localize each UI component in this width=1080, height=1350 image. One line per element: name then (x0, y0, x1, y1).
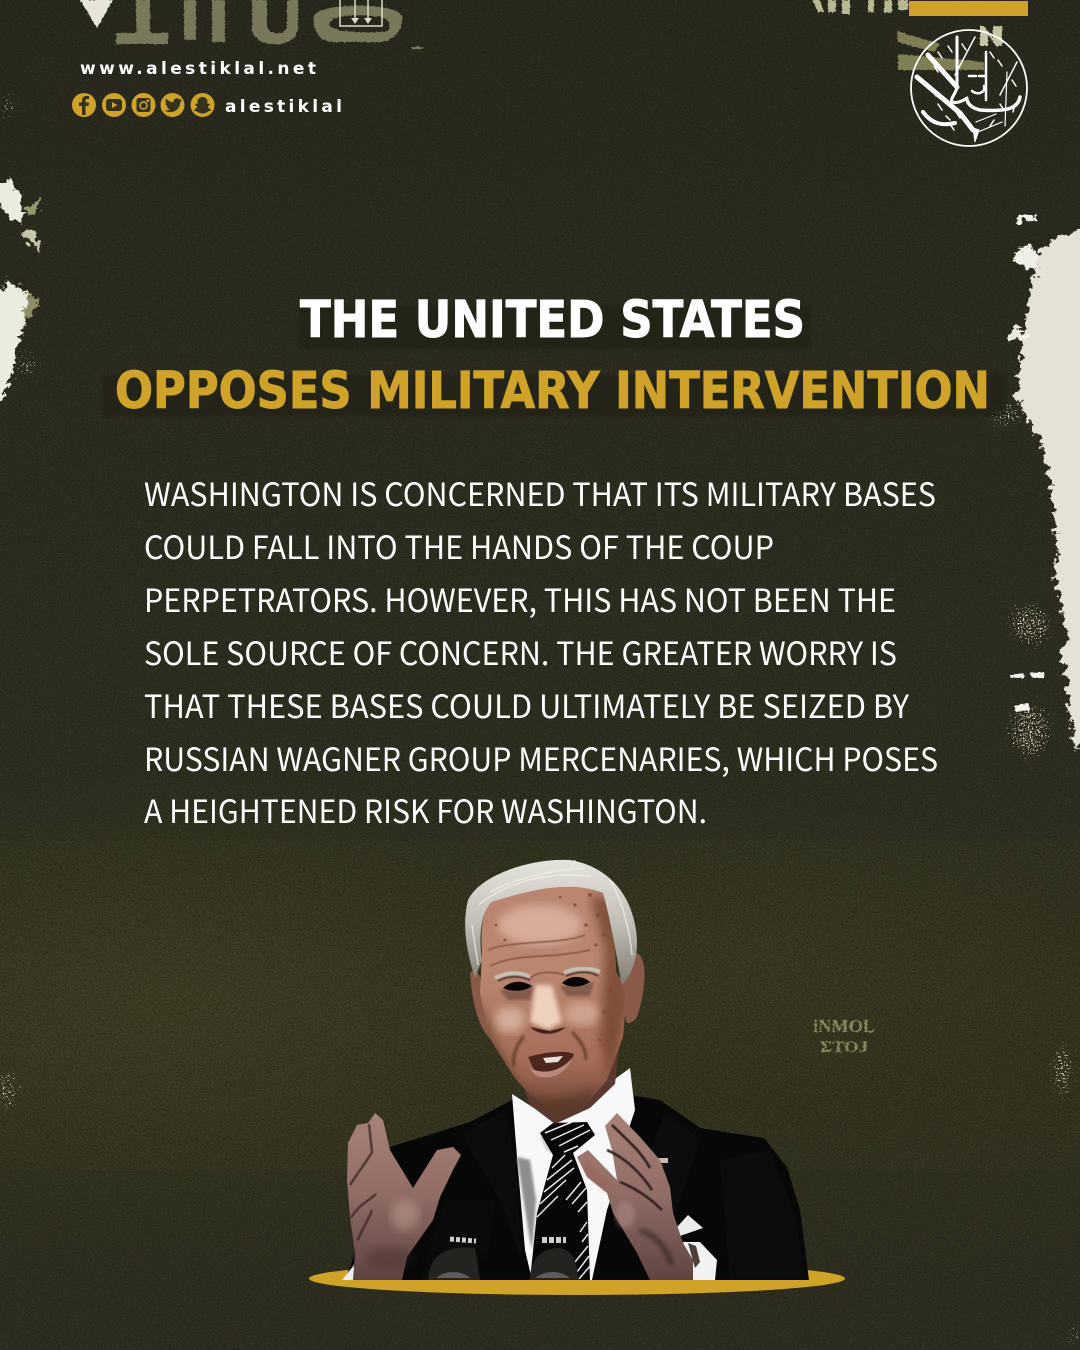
logo: calligraphic roundel (911, 30, 1027, 146)
jacket sheen (462, 1110, 805, 1278)
torn paper flecks: right (1010, 334, 1044, 712)
shirt (512, 1068, 635, 1280)
pocket square (677, 1215, 703, 1236)
hair (465, 860, 637, 985)
icon: arrows box (340, 0, 382, 26)
left cuff (342, 1264, 355, 1280)
website address: www.alestiklal.net (80, 59, 316, 79)
social handle: alestiklal (225, 97, 342, 117)
ghost stamp: iNMOL: ΣTOJ (820, 1039, 868, 1056)
tie (530, 1122, 595, 1280)
ears (470, 953, 645, 1040)
left cheek shade (482, 1002, 537, 1099)
left hand finger gaps and shading (350, 1124, 376, 1240)
right hand (577, 1113, 693, 1280)
portrait: speaker at podium (342, 860, 809, 1280)
left hand (347, 1113, 461, 1280)
title (103, 291, 1005, 421)
microphones (428, 1236, 578, 1280)
ghost type fragments: top right (812, 0, 1002, 70)
body text: WASHINGTON IS CONCERNED THAT ITS MILITARY BASES (144, 470, 936, 516)
face (480, 887, 627, 1104)
torn paper edge: right (1006, 214, 1080, 764)
icon: snapchat (190, 93, 214, 117)
body text: RUSSIAN WAGNER GROUP MERCENARIES, WHICH POSES (144, 735, 938, 781)
lapel pin (658, 1158, 668, 1163)
forehead wrinkles (488, 935, 590, 978)
title shadow bars (103, 306, 1005, 416)
freckles (494, 893, 614, 1042)
shirt shadow (517, 1157, 536, 1250)
right temple shade (590, 895, 630, 1085)
body text: SOLE SOURCE OF CONCERN. THE GREATER WORRY IS (144, 629, 897, 675)
mouth (528, 1052, 574, 1073)
body text: THAT THESE BASES COULD ULTIMATELY BE SEIZED BY (144, 682, 910, 728)
cheek highlights (495, 1007, 525, 1033)
body text (144, 470, 938, 833)
neck (524, 1047, 620, 1124)
icon: instagram (132, 93, 156, 117)
icon: twitter (160, 93, 184, 117)
nose (530, 985, 562, 1030)
body text: PERPETRATORS. HOWEVER, THIS HAS NOT BEEN THE (144, 576, 896, 622)
title line 1: THE UNITED STATES (300, 291, 805, 350)
icon: youtube (102, 93, 126, 117)
right cuff and watch (683, 1242, 717, 1280)
ghost stamp: iNMOL (813, 1016, 875, 1056)
social icons (72, 93, 214, 117)
lower face shade (533, 1084, 598, 1113)
gold bar (909, 1, 1028, 16)
left eye (500, 982, 534, 1000)
icon: facebook (72, 93, 96, 117)
right hand finger gaps and shading (607, 1125, 662, 1210)
hair strands (472, 860, 632, 965)
body text: COULD FALL INTO THE HANDS OF THE COUP (144, 523, 774, 569)
torn paper edge: left (0, 178, 40, 404)
ghost stamp: iNMOL: iNMOL (813, 1016, 875, 1036)
right eye (560, 977, 594, 996)
forehead highlight (498, 905, 582, 945)
gold ellipse pedestal (309, 1262, 845, 1295)
collar fold (540, 1136, 552, 1154)
body text: A HEIGHTENED RISK FOR WASHINGTON. (144, 787, 707, 833)
eyebrows (495, 968, 600, 978)
jacket (345, 1095, 809, 1280)
ghost type fragments: top left (80, 0, 423, 49)
